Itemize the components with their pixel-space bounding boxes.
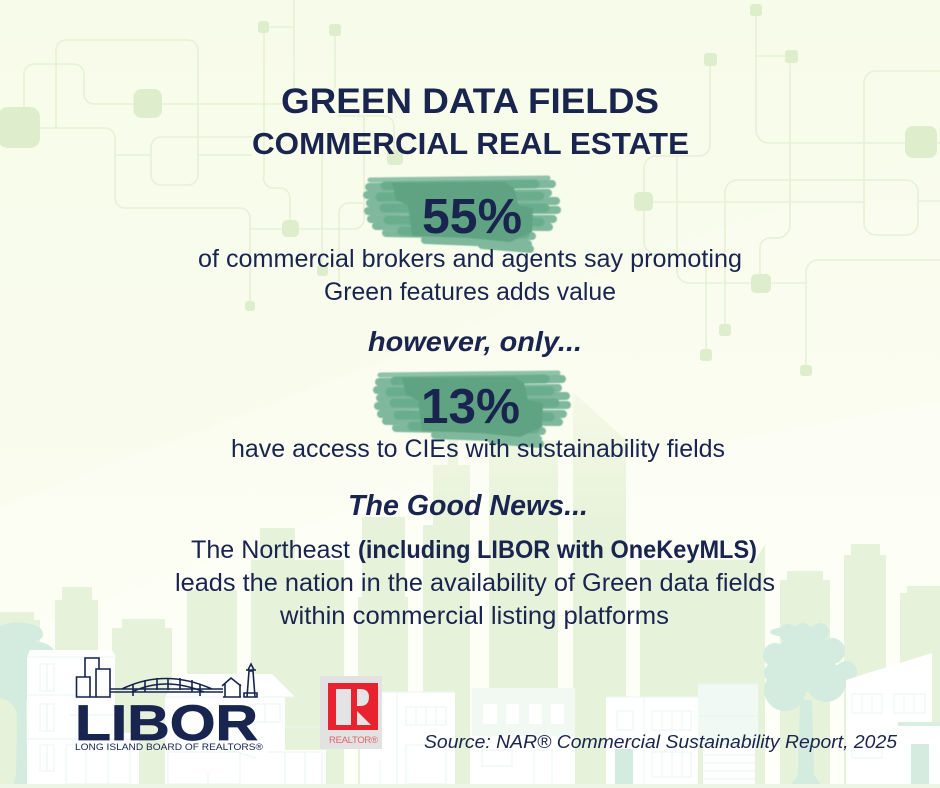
- circuit lines right: [634, 4, 940, 376]
- city skyline background: [0, 392, 940, 788]
- title: [252, 82, 689, 161]
- house 5: [606, 697, 698, 785]
- circuit lines left: [0, 0, 403, 311]
- house 4: [472, 688, 575, 785]
- stat: 55%: 55%: [422, 190, 522, 244]
- text: 55% description: [198, 245, 742, 306]
- text: good news description: [175, 536, 775, 630]
- subheading: however, only: however, only...: [368, 326, 582, 357]
- text: 55% description: of commercial brokers and agents say promoting: [198, 245, 742, 273]
- source note: Source: NAR® Commercial Sustainability Report, 2025: [424, 731, 898, 752]
- stat: 13%: 13%: [421, 380, 520, 434]
- house 1: [27, 650, 139, 784]
- text: good news description: (including LIBOR with OneKeyMLS): [358, 536, 757, 564]
- logo: REALTOR: [320, 676, 382, 749]
- brush stroke: 55%: [367, 178, 557, 249]
- houses: [0, 650, 940, 788]
- title: COMMERCIAL REAL ESTATE: [252, 126, 689, 161]
- right tree: [763, 623, 857, 786]
- house 6: [698, 684, 758, 785]
- left tree: [0, 622, 54, 786]
- logo tagline: LONG ISLAND BOARD OF REALTORS®: [75, 742, 263, 753]
- house 3: [360, 692, 455, 785]
- title: GREEN DATA FIELDS: [281, 82, 659, 121]
- brush stroke: 13%: [377, 373, 567, 444]
- text: good news description: within commercial listing platforms: [279, 602, 669, 630]
- logo: REALTOR: REALTOR®: [329, 735, 378, 746]
- logo: LIBOR: [75, 658, 263, 753]
- logo wordmark: LIBOR: [75, 695, 258, 751]
- ground: [0, 784, 940, 788]
- subheading: the good news: The Good News...: [348, 490, 588, 522]
- house 2: [165, 674, 326, 785]
- text: good news description: The Northeast: [191, 536, 350, 564]
- text: 13% description: have access to CIEs with sustainability fields: [231, 435, 725, 463]
- text: 55% description: Green features adds value: [324, 278, 616, 306]
- house 7: [846, 653, 940, 785]
- logo skyline: [76, 658, 257, 697]
- text: good news description: leads the nation in the availability of Green data fields: [175, 569, 775, 597]
